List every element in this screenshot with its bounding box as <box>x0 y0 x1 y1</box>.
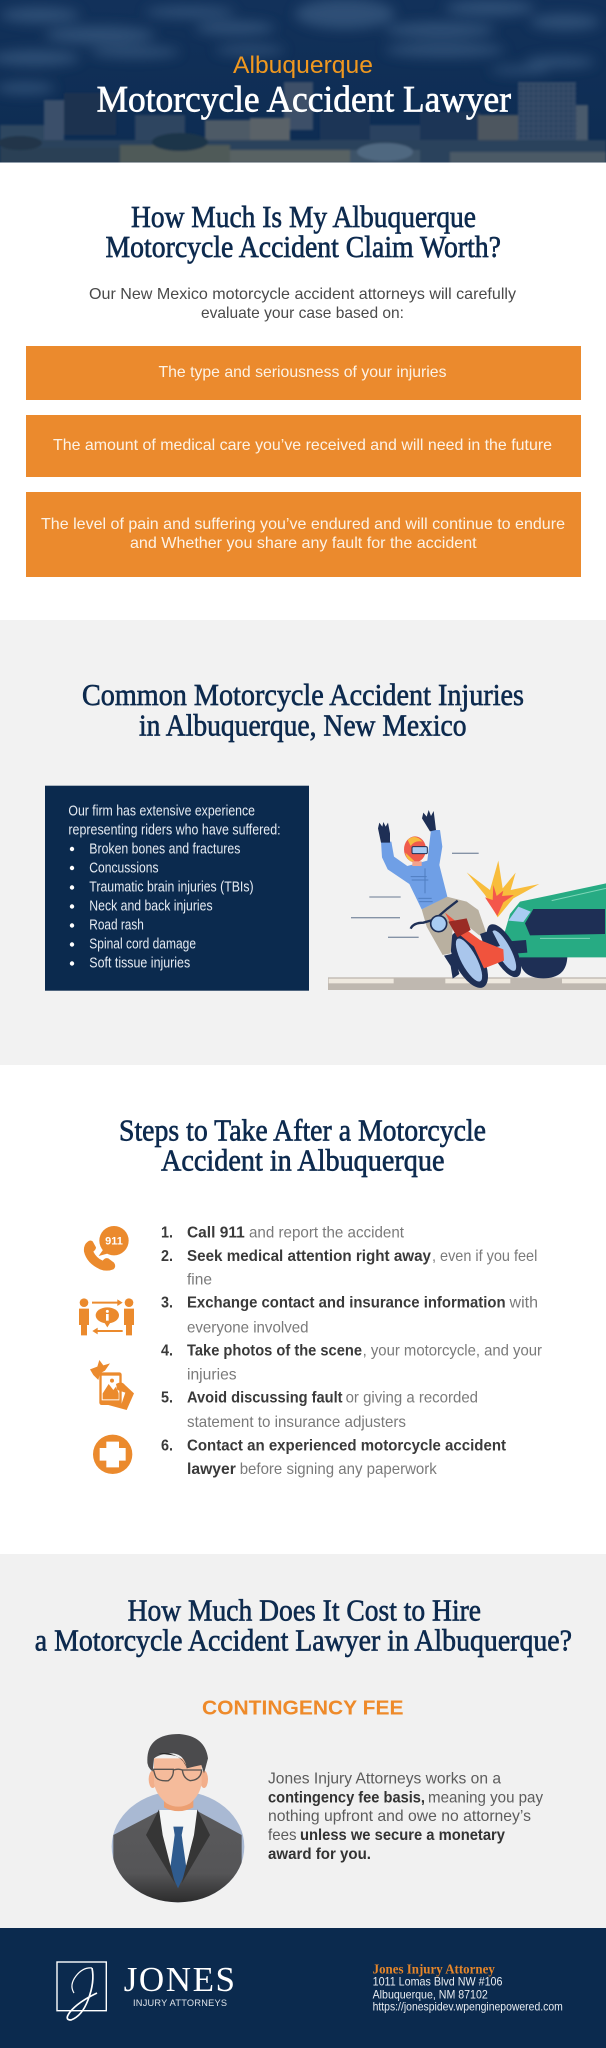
logo: Jones Injury Attorneys <box>57 1960 235 2020</box>
explosion <box>467 861 539 917</box>
step 4: 4. <box>161 1343 173 1360</box>
header title: Motorcycle Accident Lawyer <box>97 80 511 121</box>
step 4: , your motorcycle, and your <box>363 1343 543 1360</box>
step 3: everyone involved <box>187 1319 308 1336</box>
step 6: before signing any paperwork <box>240 1461 438 1478</box>
contact details: 1011 Lomas Blvd NW #106 <box>373 1975 503 1989</box>
factor bar: medical care: The amount of medical care you’ve received and will need in the future <box>53 437 552 454</box>
heading: steps <box>119 1113 486 1178</box>
subheading: contingency fee: CONTINGENCY FEE <box>202 1697 404 1719</box>
panel: common injuries <box>0 620 606 1065</box>
car <box>500 883 606 978</box>
heading: common injuries <box>82 677 524 743</box>
injuries list box: Spinal cord damage <box>89 937 196 953</box>
heading: claim worth: Motorcycle Accident Claim Worth? <box>106 229 501 264</box>
heading: steps: Steps to Take After a Motorcycle <box>119 1113 486 1148</box>
icon: phone 911 <box>84 1226 129 1271</box>
contact details: https://jonespidev.wpenginepowered.com <box>373 2000 563 2014</box>
factor bar: pain and fault: The level of pain and suffering you’ve endured and will continue to endure <box>41 516 565 533</box>
contact details <box>373 1962 563 2014</box>
icon: medical cross <box>93 1435 132 1474</box>
logo: Jones Injury Attorneys: INJURY ATTORNEYS <box>133 1998 227 2008</box>
step 3: 3. <box>161 1295 173 1312</box>
panel: steps <box>0 1065 606 1554</box>
heading: cost: How Much Does It Cost to Hire <box>128 1593 481 1628</box>
rider torso and arms <box>381 830 447 909</box>
step 2 <box>161 1248 537 1288</box>
step 4 <box>161 1343 543 1384</box>
header subtitle: Albuquerque <box>233 52 373 79</box>
road <box>328 977 606 990</box>
logo: Jones Injury Attorneys: JONES <box>124 1960 235 1999</box>
gloves <box>378 810 436 843</box>
step 5: Avoid discussing fault <box>187 1390 343 1407</box>
step 6: Contact an experienced motorcycle accident <box>187 1438 507 1455</box>
step 5: statement to insurance adjusters <box>187 1414 406 1431</box>
panel: footer <box>0 1928 606 2048</box>
injuries list box: Our firm has extensive experience <box>68 804 255 820</box>
panel: header banner <box>0 0 606 163</box>
motorcycle wheels <box>442 919 528 994</box>
injuries list box: Soft tissue injuries <box>89 956 190 972</box>
step 2: 2. <box>161 1248 173 1265</box>
illustration: lawyer avatar <box>112 1734 244 1907</box>
contingency text: contingency fee basis, <box>268 1789 425 1806</box>
heading: steps: Accident in Albuquerque <box>161 1143 444 1178</box>
step 1: and report the accident <box>249 1225 405 1242</box>
contingency text: nothing upfront and owe no attorney’s <box>268 1808 531 1825</box>
factor bar: injuries <box>26 346 581 400</box>
motorcycle body <box>411 901 504 968</box>
step 6: 6. <box>161 1438 173 1455</box>
heading: claim worth <box>106 199 501 264</box>
step 5: 5. <box>161 1390 173 1407</box>
injuries list box: representing riders who have suffered: <box>68 823 281 839</box>
step 2: Seek medical attention right away <box>187 1248 431 1265</box>
heading: common injuries: Common Motorcycle Accident Injuries <box>82 677 524 712</box>
heading: common injuries: in Albuquerque, New Mexico <box>139 708 466 743</box>
contact details: Albuquerque, NM 87102 <box>373 1988 488 2002</box>
contingency text: fees <box>268 1827 296 1844</box>
icon: exchange information <box>79 1298 134 1335</box>
step 3: Exchange contact and insurance information <box>187 1295 506 1312</box>
heading: claim worth: How Much Is My Albuquerque <box>131 199 476 234</box>
contingency text: award for you. <box>268 1846 371 1863</box>
injuries list box <box>45 786 309 991</box>
intro text: evaluate your case based on: <box>201 305 404 322</box>
contingency text: meaning you pay <box>428 1789 543 1806</box>
panel: cost <box>0 1554 606 1928</box>
factor bar: injuries: The type and seriousness of your injuries <box>158 364 446 381</box>
step 4: Take photos of the scene <box>187 1343 362 1360</box>
factor bar: medical care <box>26 415 581 477</box>
step 6: lawyer <box>187 1461 236 1478</box>
step 3 <box>161 1295 538 1336</box>
helmet <box>404 836 427 866</box>
injuries list box: Neck and back injuries <box>89 899 213 915</box>
factor bar: pain and fault: and Whether you share any fault for the accident <box>130 535 477 552</box>
step 5 <box>161 1390 478 1431</box>
intro text: Our New Mexico motorcycle accident attorneys will carefully <box>89 286 516 303</box>
contact details: Jones Injury Attorney <box>373 1962 495 1977</box>
icon: phone 911: 911 <box>105 1236 123 1248</box>
heading: cost <box>35 1593 572 1658</box>
injuries list box: Broken bones and fractures <box>89 842 240 858</box>
step 3: with <box>508 1295 538 1312</box>
injuries list box: Concussions <box>89 861 158 877</box>
step 2: fine <box>187 1271 212 1288</box>
injuries list box: Traumatic brain injuries (TBIs) <box>89 880 254 896</box>
step 5: or giving a recorded <box>346 1390 478 1407</box>
contingency text: Jones Injury Attorneys works on a <box>268 1770 501 1787</box>
step 6 <box>161 1438 507 1478</box>
intro text <box>89 286 516 322</box>
step 1: Call 911 <box>187 1225 245 1242</box>
icon: phone camera <box>90 1360 134 1410</box>
step 1: 1. <box>161 1225 173 1242</box>
step 1 <box>161 1225 405 1242</box>
motion lines <box>351 853 479 937</box>
step 2: , even if you feel <box>432 1248 537 1265</box>
step 4: injuries <box>187 1367 237 1384</box>
factor bar: pain and fault <box>26 492 581 577</box>
contingency text <box>268 1770 543 1863</box>
panel: claim worth <box>0 162 606 620</box>
rider legs <box>422 897 500 979</box>
contingency text: unless we secure a monetary <box>300 1827 505 1844</box>
illustration: motorcycle crash <box>328 810 606 994</box>
injuries list box: Road rash <box>89 918 144 934</box>
